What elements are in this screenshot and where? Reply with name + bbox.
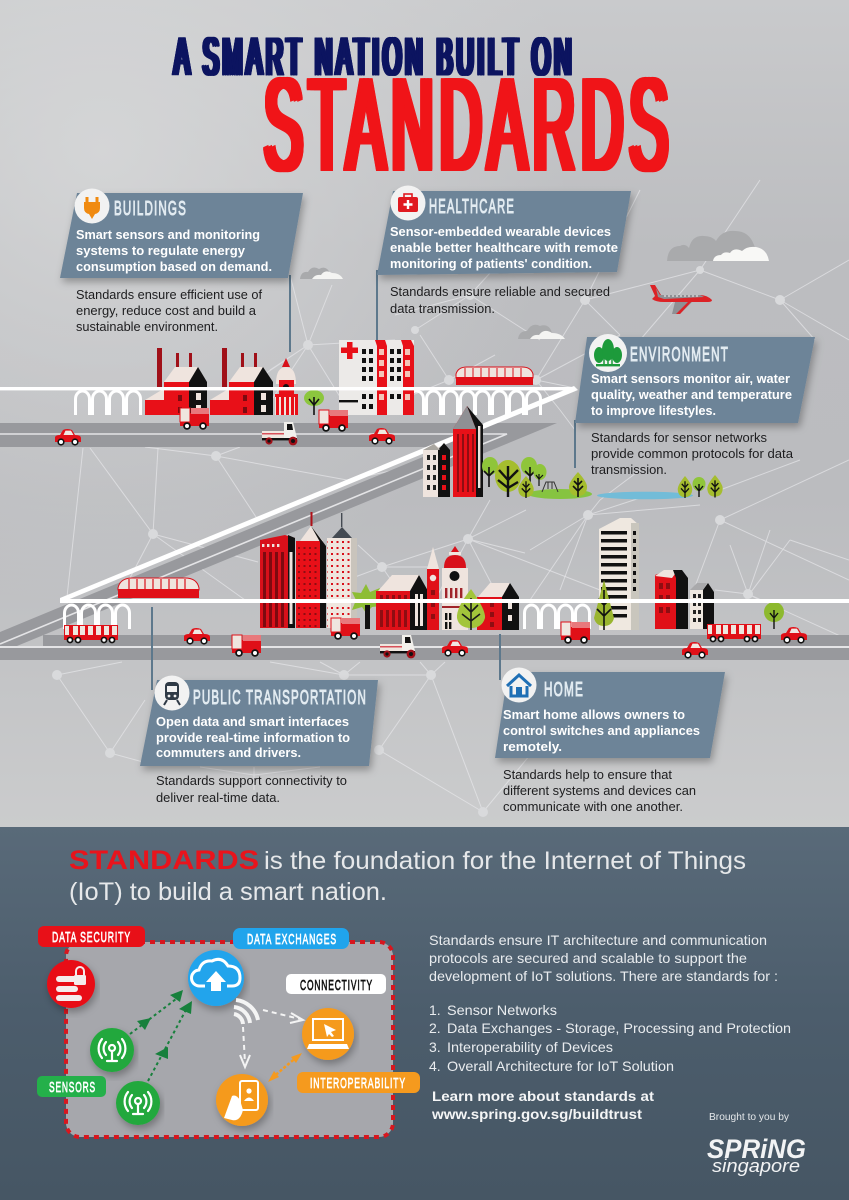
body text: deliver real-time data. — [156, 790, 280, 805]
icon: data security — [47, 960, 95, 1008]
heading: PUBLIC TRANSPORTATION — [193, 687, 367, 709]
domed hall — [275, 358, 298, 415]
title line one: A SMART NATION BUILT ON — [174, 27, 576, 87]
heading: HEALTHCARE — [429, 196, 515, 218]
body text: Standards for sensor networks — [591, 430, 767, 445]
red and black block — [655, 570, 688, 629]
white pickup truck — [380, 635, 415, 658]
network nodes — [52, 266, 785, 817]
icon: cloud upload — [188, 950, 244, 1006]
red truck — [331, 618, 360, 640]
title — [172, 27, 675, 198]
network mesh background — [57, 180, 849, 812]
body text: Standards ensure reliable and secured — [390, 284, 610, 299]
white text: quality, weather and temperature — [591, 387, 792, 402]
call to action: www.spring.gov.sg/buildtrust — [431, 1106, 642, 1122]
white text — [390, 224, 618, 271]
swing — [542, 482, 558, 492]
tree by pond middle — [692, 477, 706, 497]
tree beside hall — [304, 390, 324, 415]
bus — [707, 624, 761, 642]
cloud middle — [518, 325, 565, 339]
panel: buildings — [60, 188, 303, 334]
white text: Smart sensors monitor air, water — [591, 371, 790, 386]
white text: commuters and drivers. — [156, 745, 301, 760]
white text: control switches and appliances — [503, 723, 700, 738]
white text: to improve lifestyles. — [591, 403, 716, 418]
tree big — [495, 460, 521, 497]
text block: IoT standards: protocols are secured and scalable to support the — [429, 950, 747, 966]
lower train — [118, 578, 199, 598]
car — [781, 627, 807, 644]
car — [55, 429, 81, 446]
white striped tower — [599, 518, 639, 630]
pine by lawn — [569, 472, 587, 497]
small building by tower — [423, 443, 450, 497]
body text: data transmission. — [390, 301, 495, 316]
airplane — [650, 285, 712, 314]
panel: home — [495, 668, 725, 814]
label: interoperability: INTEROPERABILITY — [310, 1075, 406, 1092]
text block: IoT standards — [429, 932, 778, 984]
icon: phone — [216, 1074, 268, 1126]
small tree right — [764, 602, 784, 629]
list of standards: 4. — [429, 1058, 441, 1074]
tree back one — [521, 457, 537, 487]
label: data security: DATA SECURITY — [52, 929, 131, 946]
icon: trees — [589, 334, 627, 372]
arrows: connectivity — [240, 1010, 303, 1067]
list of standards: 3. — [429, 1039, 441, 1055]
factory two — [210, 348, 273, 415]
white text — [591, 371, 792, 418]
factory one — [145, 348, 207, 415]
panel: healthcare — [377, 186, 631, 316]
cloud right — [667, 231, 769, 261]
park lawn — [528, 489, 592, 499]
pond — [597, 492, 693, 499]
text block: IoT standards: development of IoT solutions. There are standards for : — [429, 968, 778, 984]
upper road with diagonal ramp — [0, 423, 557, 653]
body text — [156, 773, 347, 805]
white text — [76, 227, 272, 274]
heading: ENVIRONMENT — [630, 344, 729, 366]
icon: laptop — [302, 1008, 354, 1060]
white text: monitoring of patients' condition. — [390, 256, 592, 271]
list of standards: Data Exchanges - Storage, Processing and Protection — [447, 1020, 791, 1036]
title line two: STANDARDS — [264, 51, 675, 198]
call to action: Learn more about standards at — [432, 1088, 654, 1104]
clock tower — [427, 547, 439, 630]
label: data security — [38, 926, 145, 947]
car — [442, 640, 468, 657]
horizontal rails — [0, 387, 849, 603]
foundation heading: (IoT) to build a smart nation. — [69, 878, 387, 906]
panel: foundation footer — [0, 827, 849, 1200]
white text: consumption based on demand. — [76, 259, 272, 274]
list of standards: 2. — [429, 1020, 441, 1036]
foundation heading: is the foundation for the Internet of Things — [264, 847, 746, 875]
upper train — [456, 367, 533, 385]
pale spired tower — [327, 513, 357, 628]
red truck — [561, 622, 590, 644]
logo: SPRING Singapore: singapore — [712, 1156, 800, 1176]
small white block — [690, 583, 714, 629]
park with trees and swing — [482, 457, 723, 499]
label: connectivity: CONNECTIVITY — [300, 977, 373, 994]
page background — [0, 0, 849, 830]
icon: wifi connectivity — [234, 1000, 258, 1024]
heading: HOME — [544, 679, 584, 701]
icon: train — [154, 676, 190, 710]
tree by pond right — [707, 475, 723, 498]
car — [682, 642, 708, 659]
body text — [503, 767, 696, 814]
tree back two — [534, 464, 546, 486]
arrows: sensor links — [130, 990, 192, 1081]
diagram: IoT — [37, 926, 420, 1137]
bus — [64, 625, 118, 643]
white text: provide real-time information to — [156, 730, 350, 745]
body text — [591, 430, 794, 477]
red spired tower — [296, 512, 326, 628]
green tree by civic building — [457, 589, 485, 630]
body text: provide common protocols for data — [591, 446, 794, 461]
logo: SPRING Singapore: SPRiNG — [707, 1134, 806, 1164]
lower arches — [64, 605, 590, 629]
red truck — [180, 408, 209, 430]
tree small — [518, 476, 534, 498]
body text: transmission. — [591, 462, 667, 477]
body text: Standards help to ensure that — [503, 767, 672, 782]
upper road vehicles — [55, 408, 395, 446]
white text: Smart home allows owners to — [503, 707, 685, 722]
label: sensors — [37, 1076, 106, 1097]
panel: environment — [575, 334, 815, 477]
label: data exchanges — [233, 928, 349, 949]
list of standards: Overall Architecture for IoT Solution — [447, 1058, 674, 1074]
label: connectivity — [286, 974, 386, 994]
white text: systems to regulate energy — [76, 243, 246, 258]
car — [369, 428, 395, 445]
red office tower — [260, 535, 295, 628]
hospital — [339, 340, 414, 415]
white pickup truck — [262, 422, 297, 445]
list of standards — [429, 1002, 791, 1074]
label: sensors: SENSORS — [49, 1079, 96, 1096]
cloud left — [300, 268, 343, 279]
dashed frame — [66, 942, 393, 1137]
diagonal rail — [60, 386, 578, 603]
foundation heading — [69, 845, 746, 906]
label: data exchanges: DATA EXCHANGES — [247, 931, 337, 948]
car — [184, 628, 210, 645]
heading: BUILDINGS — [114, 198, 187, 220]
icon: plug — [74, 188, 110, 224]
icon: house — [502, 668, 536, 702]
white text: enable better healthcare with remote — [390, 240, 618, 255]
white text — [503, 707, 700, 754]
body text — [76, 287, 262, 334]
foundation heading: STANDARDS — [69, 845, 259, 875]
lower road — [0, 635, 849, 660]
tree bright — [482, 457, 498, 487]
red truck — [232, 635, 261, 657]
clouds — [300, 231, 769, 339]
panel: public transportation — [140, 676, 378, 805]
white text: Open data and smart interfaces — [156, 714, 349, 729]
connector lines — [152, 270, 575, 690]
icon: sensor bottom — [116, 1081, 160, 1125]
red house right — [477, 583, 519, 630]
logo: SPRING Singapore — [707, 1134, 806, 1176]
lower road vehicles — [64, 618, 807, 659]
arrows: interoperability — [268, 1053, 302, 1082]
body text: energy, reduce cost and build a — [76, 303, 257, 318]
body text: different systems and devices can — [503, 783, 696, 798]
red van — [319, 410, 348, 432]
icon: first aid kit — [390, 186, 426, 220]
tree by pond — [678, 476, 692, 498]
domed civic building — [442, 546, 468, 630]
body text: sustainable environment. — [76, 319, 218, 334]
pine tree — [594, 580, 614, 630]
icon: sensor left — [90, 1028, 134, 1072]
list of standards: Sensor Networks — [447, 1002, 557, 1018]
white text: remotely. — [503, 739, 562, 754]
brought to you by: Brought to you by — [709, 1111, 790, 1123]
text block: IoT standards: Standards ensure IT architecture and communication — [429, 932, 767, 948]
upper arches — [76, 391, 540, 415]
white text: Smart sensors and monitoring — [76, 227, 260, 242]
palm tree — [352, 584, 381, 629]
label: interoperability — [297, 1072, 420, 1093]
red house with black gable — [376, 575, 428, 630]
body text — [390, 284, 610, 316]
list of standards: 1. — [429, 1002, 441, 1018]
white text: Sensor-embedded wearable devices — [390, 224, 611, 239]
body text: Standards ensure efficient use of — [76, 287, 262, 302]
body text: communicate with one another. — [503, 799, 683, 814]
red tower — [453, 406, 483, 497]
list of standards: Interoperability of Devices — [447, 1039, 613, 1055]
white text — [156, 714, 350, 760]
call to action — [431, 1088, 654, 1122]
body text: Standards support connectivity to — [156, 773, 347, 788]
